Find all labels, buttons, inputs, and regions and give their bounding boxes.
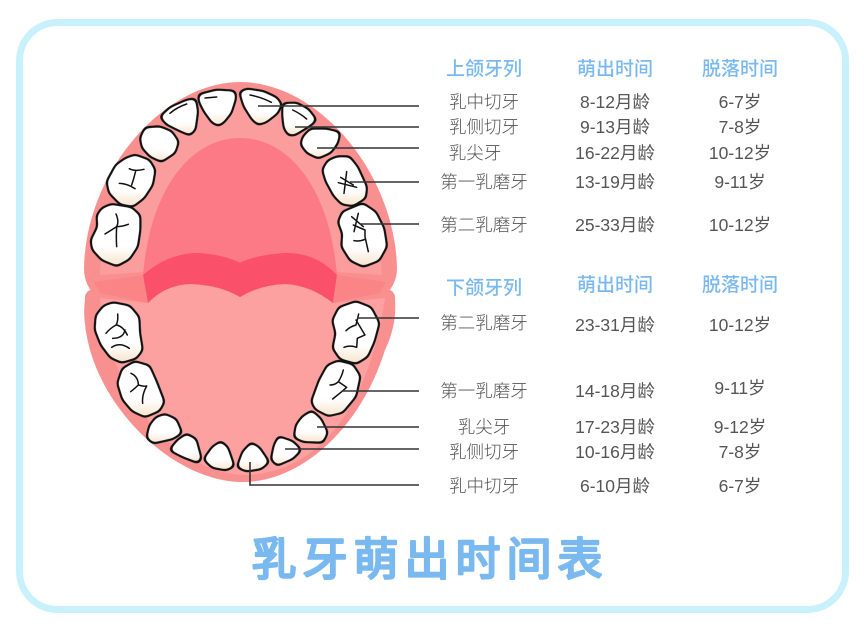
upper rows: 第二乳磨牙 [440, 212, 528, 237]
lower rows: 第二乳磨牙 [440, 310, 528, 335]
upper rows: 10-12岁 [709, 143, 771, 163]
upper rows: 10-12岁 [709, 215, 771, 235]
upper headers [446, 54, 778, 81]
lower rows: 第一乳磨牙 [440, 378, 528, 403]
lower jaw table [440, 270, 778, 498]
upper rows: 7-8岁 [719, 117, 761, 137]
lower rows [440, 310, 771, 498]
soft palate band [143, 253, 337, 303]
lower teeth [97, 304, 377, 469]
lower rows: 14-18月龄 [575, 381, 655, 401]
upper rows [440, 89, 771, 237]
left cheek fold [94, 275, 148, 303]
palate [143, 138, 337, 275]
upper headers: 脱落时间 [702, 54, 778, 81]
title: 乳牙萌出时间表 [251, 523, 609, 588]
lower rows: 6-7岁 [719, 476, 761, 496]
lower rows: 17-23月龄 [575, 417, 655, 437]
lower headers: 下颌牙列 [446, 273, 522, 300]
upper inner gum [100, 96, 382, 275]
upper rows: 9-11岁 [714, 172, 766, 192]
upper rows: 乳中切牙 [449, 89, 519, 114]
upper jaw table [440, 54, 778, 237]
upper teeth [93, 91, 384, 264]
lower rows: 10-16月龄 [575, 442, 655, 462]
upper rows: 8-12月龄 [580, 92, 651, 112]
mouth illustration [84, 82, 397, 482]
upper rows: 乳尖牙 [449, 140, 501, 165]
lower jaw gum [84, 289, 395, 482]
lower rows: 10-12岁 [709, 315, 771, 335]
upper jaw gum [84, 82, 397, 292]
lower rows: 23-31月龄 [575, 315, 655, 335]
upper headers: 萌出时间 [577, 54, 653, 81]
leader lines [250, 106, 419, 485]
upper rows: 9-13月龄 [580, 117, 651, 137]
lower rows: 9-12岁 [714, 417, 766, 437]
upper rows: 第一乳磨牙 [440, 169, 528, 194]
upper headers: 上颌牙列 [446, 54, 522, 81]
upper rows: 乳侧切牙 [449, 114, 519, 139]
upper rows: 13-19月龄 [575, 172, 655, 192]
right cheek fold [333, 275, 386, 303]
upper rows: 6-7岁 [719, 92, 761, 112]
tongue [100, 284, 385, 475]
lower rows: 6-10月龄 [580, 476, 651, 496]
lower headers: 脱落时间 [702, 270, 778, 297]
lower rows: 乳侧切牙 [449, 439, 519, 464]
upper rows: 16-22月龄 [575, 143, 655, 163]
lower rows: 7-8岁 [719, 442, 761, 462]
lower headers [446, 270, 778, 300]
upper rows: 25-33月龄 [575, 215, 655, 235]
lower headers: 萌出时间 [577, 270, 653, 297]
lower rows: 9-11岁 [714, 378, 766, 398]
lower rows: 乳中切牙 [449, 473, 519, 498]
lower rows: 乳尖牙 [458, 414, 510, 439]
